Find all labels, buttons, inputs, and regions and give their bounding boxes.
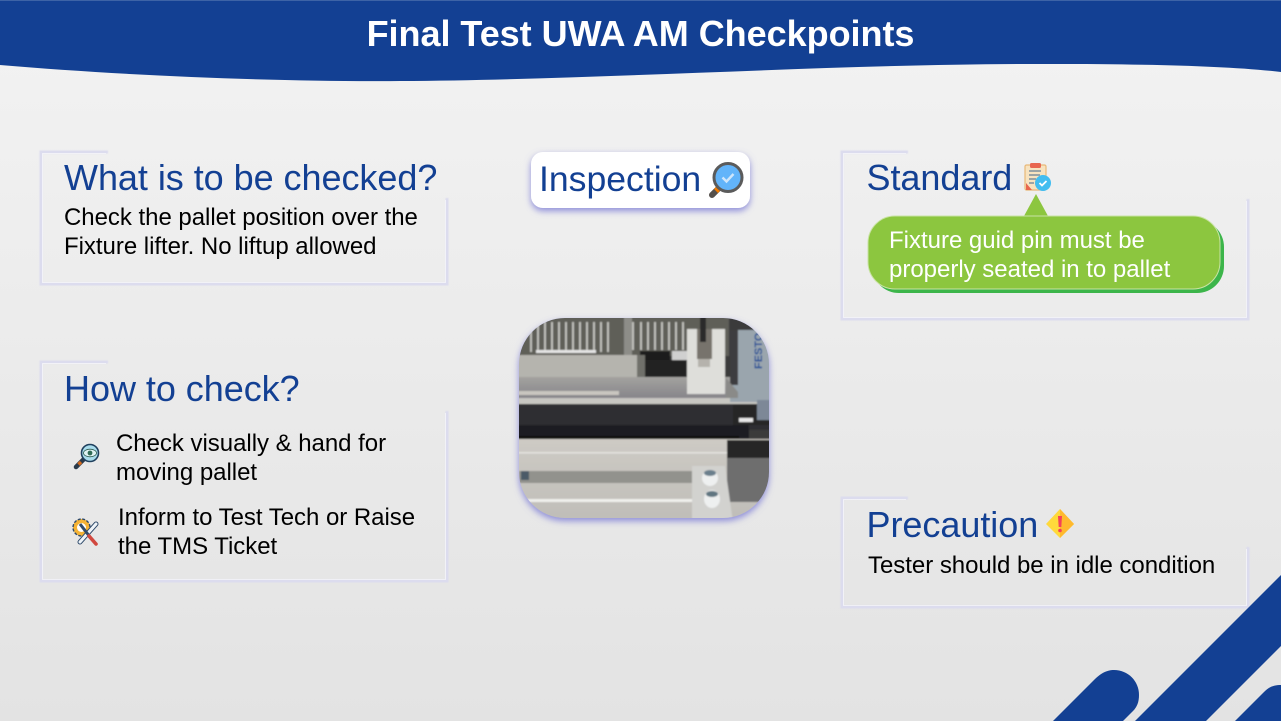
panel: standard bbox=[842, 152, 1248, 319]
text: standard requirement: Fixture guid pin must be bbox=[889, 227, 1145, 254]
text: check visually: Check visually & hand for bbox=[116, 430, 386, 457]
heading: what is to be checked: What is to be checked? bbox=[64, 157, 437, 198]
photo: pallet on fixture lifter: FESTO bbox=[753, 332, 765, 369]
text: inform tech: Inform to Test Tech or Raise bbox=[118, 504, 415, 531]
icon: clipboard with check bbox=[1025, 163, 1051, 191]
icon: magnifier with eye bbox=[76, 444, 98, 467]
heading: precaution: Precaution bbox=[866, 504, 1038, 545]
panel: inspection label bbox=[531, 152, 750, 208]
text: inform tech: the TMS Ticket bbox=[118, 533, 278, 560]
icon: gear with tools bbox=[73, 519, 96, 544]
panel: precaution bbox=[842, 498, 1248, 607]
title: Final Test UWA AM Checkpoints bbox=[367, 13, 914, 54]
panel: what is to be checked bbox=[41, 152, 447, 284]
text: standard requirement: properly seated in to pallet bbox=[889, 256, 1171, 283]
panel: how to check bbox=[41, 362, 447, 581]
icon: warning diamond bbox=[1046, 509, 1074, 538]
icon: orange magnifier bbox=[712, 164, 742, 195]
text: check description: Check the pallet position over the bbox=[64, 204, 418, 231]
text: check visually: moving pallet bbox=[116, 459, 257, 486]
heading: standard: Standard bbox=[866, 157, 1012, 198]
heading: inspection: Inspection bbox=[539, 159, 701, 199]
text: check description: Fixture lifter. No liftup allowed bbox=[64, 233, 376, 260]
decorative corner shapes bbox=[1053, 575, 1281, 721]
heading: how to check: How to check? bbox=[64, 368, 300, 409]
callout: standard requirement bbox=[868, 194, 1224, 293]
header band bbox=[0, 0, 1281, 81]
text: precaution description: Tester should be in idle condition bbox=[868, 552, 1215, 579]
photo: pallet on fixture lifter bbox=[515, 314, 773, 522]
